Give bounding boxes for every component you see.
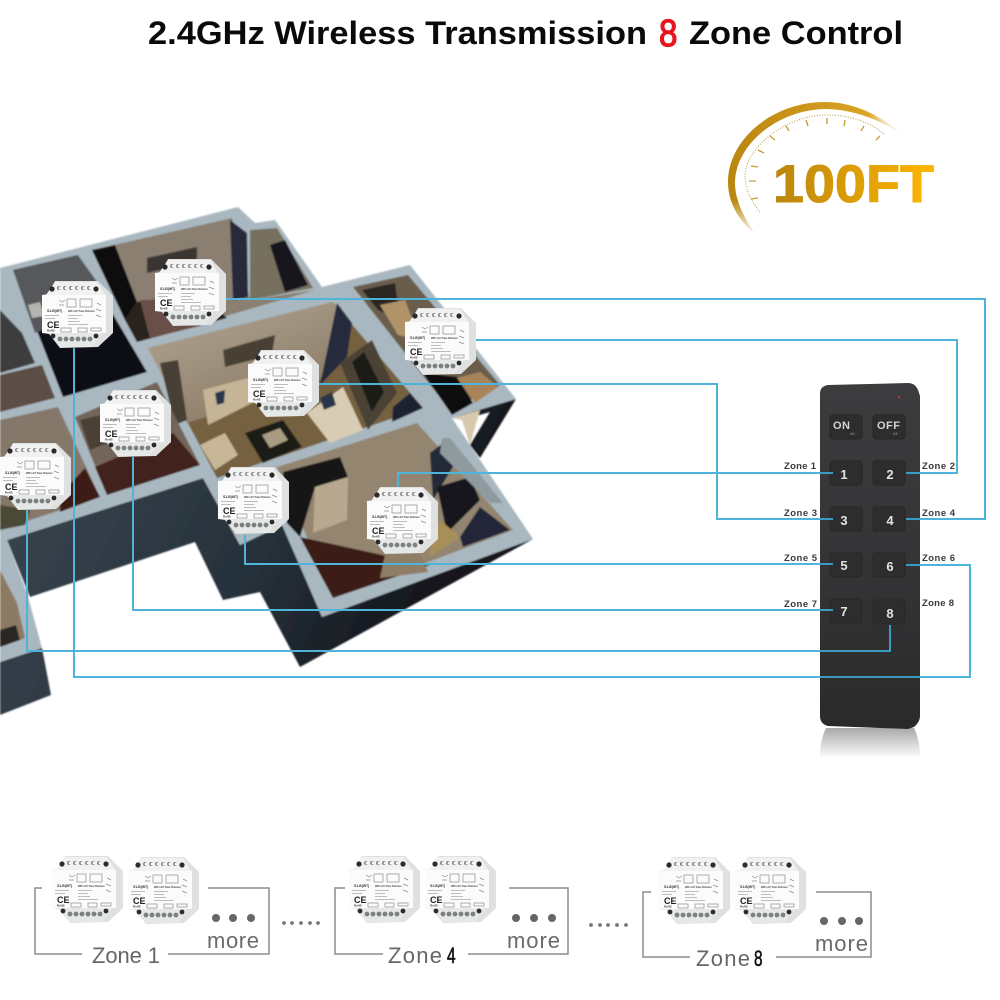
dimmer module (52, 856, 123, 923)
dimmer module: RoHS (740, 905, 748, 909)
dimmer module: CE (664, 896, 677, 906)
button: OFF (873, 415, 905, 439)
red number 8: 8 (659, 12, 677, 55)
title: 2.4GHz Wireless Transmission (148, 15, 647, 51)
dimmer module: S1-B(WT) (430, 884, 445, 888)
dimmer module: RoHS (664, 905, 672, 909)
exterior dark walls (0, 399, 533, 715)
remote reflection (820, 728, 920, 758)
button: 3: 3 (840, 513, 848, 528)
zone labels beside remote: Zone 6 (922, 553, 955, 564)
zone labels beside remote: Zone 1 (784, 461, 817, 472)
module: zone 4 dimmer in bedroom: S1-B(WT) (160, 287, 175, 291)
module: zone 4 dimmer in bedroom: RoHS (160, 307, 168, 311)
legend: zone 8 group (643, 857, 871, 972)
module: zone 8 dimmer in west room (0, 443, 71, 510)
legend: zone 4 group (335, 856, 568, 969)
dimmer module: WiFi-All Triac Dimmer (375, 884, 402, 888)
remote button line overlays (820, 473, 920, 677)
dimmer module: CE (57, 895, 70, 905)
module: zone 3 dimmer in living room: WiFi-All Triac Dimmer (274, 378, 301, 382)
legend: zone 1 group: more (207, 928, 259, 953)
dimmer module: WiFi-All Triac Dimmer (78, 884, 105, 888)
dimmer module: S1-B(WT) (664, 885, 679, 889)
button: 2: 2 (886, 467, 894, 482)
module: zone 8 dimmer in west room: CE (5, 482, 18, 492)
dimmer module: RoHS (57, 904, 65, 908)
button: ON (830, 415, 862, 439)
more dots (212, 914, 255, 922)
button: ON: All (850, 431, 855, 436)
module: zone 3 dimmer in living room: CE (253, 389, 266, 399)
module: zone 7 dimmer in dining room: RoHS (105, 438, 113, 442)
legend: zone 8 group: Zone (696, 946, 750, 971)
zone labels beside remote: Zone 2 (922, 461, 955, 472)
module: zone 7 dimmer in dining room (100, 390, 171, 457)
dimmer module (659, 857, 730, 924)
module: zone 6 dimmer in NW room: RoHS (47, 329, 55, 333)
module: zone 1 dimmer in south bedroom: WiFi-All Triac Dimmer (393, 515, 420, 519)
button: OFF: OFF (877, 420, 900, 432)
line: zone 4 (225, 299, 985, 519)
line: zone 5 (245, 535, 833, 564)
line: zone 3 (318, 384, 833, 519)
module: zone 5 dimmer on wall: CE (223, 506, 236, 516)
button: 7: 7 (840, 604, 848, 619)
room: dining room (75, 382, 200, 495)
button: 7 (830, 599, 862, 623)
button: 3 (830, 507, 862, 531)
zone labels beside remote: Zone 5 (784, 553, 818, 564)
title: Zone Control (689, 15, 903, 51)
button: 1 (830, 461, 862, 485)
button: 6: 6 (886, 559, 894, 574)
module: zone 1 dimmer in south bedroom (367, 487, 438, 554)
module: zone 3 dimmer in living room: S1-B(WT) (253, 378, 268, 382)
module: zone 1 dimmer in south bedroom: RoHS (372, 535, 380, 539)
module: zone 7 dimmer in dining room: WiFi-All Triac Dimmer (126, 418, 153, 422)
module: zone 4 dimmer in bedroom: WiFi-All Triac Dimmer (181, 287, 208, 291)
zone labels beside remote: Zone 3 (784, 508, 817, 519)
module: zone 6 dimmer in NW room: CE (47, 320, 60, 330)
dimmer module: WiFi-All Triac Dimmer (154, 885, 181, 889)
legend: zone 8 group: 8 (754, 947, 763, 972)
badge: 100FT range gauge (725, 102, 934, 236)
button: 2 (873, 461, 905, 485)
line: zone 6 (74, 348, 970, 677)
zone labels beside remote: Zone 8 (922, 598, 954, 609)
button: 4 (873, 507, 905, 531)
badge: 100FT range gauge: 100FT (773, 155, 934, 214)
button: OFF: All (893, 431, 898, 436)
dimmer module: WiFi-All Triac Dimmer (451, 884, 478, 888)
room: living room (148, 302, 423, 478)
room: bathroom and dark room (13, 255, 147, 397)
button: 5 (830, 553, 862, 577)
indicator LED (898, 396, 900, 398)
dimmer module: CE (430, 895, 443, 905)
dimmer module: WiFi-All Triac Dimmer (685, 885, 712, 889)
remote control (820, 383, 920, 758)
module: zone 2 dimmer in balcony room: WiFi-All Triac Dimmer (431, 336, 458, 340)
wall tops (0, 207, 533, 662)
line: zone 7 (133, 457, 833, 610)
module: zone 1 dimmer in south bedroom: S1-B(WT) (372, 515, 387, 519)
dimmer module: S1-B(WT) (57, 884, 72, 888)
legend: zone 4 group: 4 (447, 944, 456, 969)
dimmer module: RoHS (430, 904, 438, 908)
dimmer module: CE (133, 896, 146, 906)
module: zone 6 dimmer in NW room (42, 281, 113, 348)
module: zone 2 dimmer in balcony room: RoHS (410, 356, 418, 360)
dimmer module: S1-B(WT) (740, 885, 755, 889)
line: zone 1 (398, 473, 833, 487)
separator dots (589, 923, 628, 927)
module: zone 5 dimmer on wall: RoHS (223, 515, 231, 519)
legend: zone 4 group: Zone (388, 943, 442, 968)
button: 5: 5 (840, 558, 848, 573)
room: small north-west rooms (0, 310, 35, 373)
button: 6 (873, 553, 905, 577)
dimmer module: CE (354, 895, 367, 905)
module: zone 7 dimmer in dining room: CE (105, 429, 118, 439)
separator dots (282, 921, 320, 925)
dimmer module (349, 856, 420, 923)
room: west bedroom (0, 407, 100, 530)
dimmer module (425, 856, 496, 923)
module: zone 4 dimmer in bedroom: CE (160, 298, 173, 308)
module: zone 2 dimmer in balcony room: CE (410, 347, 423, 357)
zone labels beside remote (784, 461, 956, 610)
legend: zone 4 group: more (507, 928, 560, 953)
more dots (820, 917, 863, 925)
floor plan: 3D apartment cutaway (0, 207, 533, 715)
legend: zone 1 group (35, 856, 269, 968)
module: zone 2 dimmer in balcony room (405, 308, 476, 375)
zone labels beside remote: Zone 7 (784, 599, 817, 610)
module: zone 8 dimmer in west room: RoHS (5, 491, 13, 495)
module: zone 8 dimmer in west room: S1-B(WT) (5, 471, 20, 475)
module: zone 4 dimmer in bedroom (155, 259, 226, 326)
zone labels beside remote: Zone 4 (922, 508, 956, 519)
room: south-west corner room (0, 570, 25, 647)
module: zone 5 dimmer on wall: WiFi-All Triac Dimmer (244, 495, 271, 499)
line: zone 8 (27, 510, 890, 651)
line: zone 2 (475, 340, 957, 473)
button: ON: ON (833, 420, 850, 432)
room: right balcony room (353, 275, 500, 410)
more dots (512, 914, 556, 922)
module: zone 2 dimmer in balcony room: S1-B(WT) (410, 336, 425, 340)
dimmer module: S1-B(WT) (354, 884, 369, 888)
dimmer module (735, 857, 806, 924)
module: zone 7 dimmer in dining room: S1-B(WT) (105, 418, 120, 422)
dimmer module: RoHS (133, 905, 141, 909)
module: zone 6 dimmer in NW room: S1-B(WT) (47, 309, 62, 313)
dimmer module: RoHS (354, 904, 362, 908)
legend: zone 8 group: more (815, 931, 868, 956)
dimmer module: S1-B(WT) (133, 885, 148, 889)
dimmer module: WiFi-All Triac Dimmer (761, 885, 788, 889)
button: 4: 4 (886, 513, 894, 528)
module: zone 6 dimmer in NW room: WiFi-All Triac Dimmer (68, 309, 95, 313)
module: zone 3 dimmer in living room: RoHS (253, 398, 261, 402)
button: 1: 1 (840, 467, 848, 482)
room: south bedroom (277, 423, 513, 598)
legend: zone 1 group: Zone 1 (92, 943, 160, 968)
module: zone 8 dimmer in west room: WiFi-All Triac Dimmer (26, 471, 53, 475)
dimmer module: CE (740, 896, 753, 906)
button: 8: 8 (886, 606, 894, 621)
room: bedroom (92, 218, 315, 342)
module: zone 5 dimmer on wall (218, 467, 289, 534)
title (148, 12, 903, 55)
module: zone 5 dimmer on wall: S1-B(WT) (223, 495, 238, 499)
module: zone 1 dimmer in south bedroom: CE (372, 526, 385, 536)
module: zone 3 dimmer in living room (248, 350, 319, 417)
dimmer module (128, 857, 199, 924)
remote body (820, 383, 920, 729)
wiring: blue connection lines from remote buttons to modules (27, 299, 985, 677)
button: 8 (873, 600, 905, 624)
